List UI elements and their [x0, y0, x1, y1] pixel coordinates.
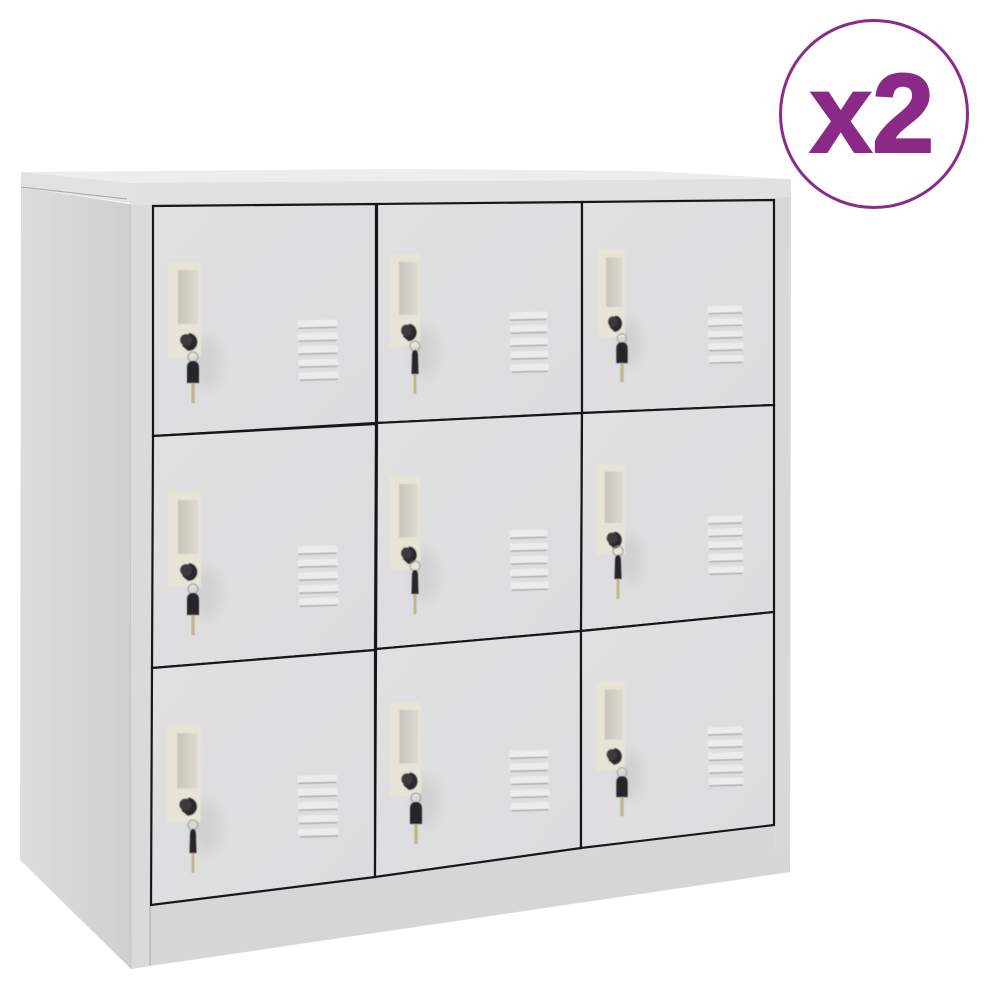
door 2: [377, 202, 582, 423]
door 4: [152, 424, 376, 668]
door 5: [376, 413, 582, 649]
badge label: x2: [810, 51, 934, 176]
door 7: [151, 650, 375, 905]
door 8 vents: [509, 749, 550, 811]
door 7 vents: [297, 774, 339, 838]
cabinet top surface: [21, 169, 791, 184]
panel: locker cabinet: [20, 169, 791, 969]
door 3 handle, lock and key: [598, 250, 641, 382]
door 3 vents: [707, 306, 744, 364]
door 1: [153, 204, 376, 436]
door 4 handle, lock and key: [168, 492, 220, 635]
door 9 vents: [707, 726, 744, 786]
door 6 handle, lock and key: [596, 464, 642, 599]
door 5 handle, lock and key: [390, 476, 437, 614]
door 4 vents: [297, 545, 339, 607]
door 3: [582, 200, 774, 413]
door 5 vents: [509, 529, 549, 591]
lockers: door panels with dark gaps: [151, 200, 774, 905]
door 9 handle, lock and key: [596, 682, 642, 816]
cabinet left side panel: [20, 187, 131, 969]
door 9: [581, 612, 774, 848]
door 2 handle, lock and key: [390, 254, 437, 394]
cabinet front frame: [130, 179, 791, 969]
cabinet top left edge band: [21, 172, 130, 203]
door 6 vents: [707, 516, 744, 575]
badge: x2 quantity: [780, 20, 968, 208]
door 1 handle, lock and key: [168, 262, 220, 403]
door 8 handle, lock and key: [390, 702, 439, 844]
door 7 handle, lock and key: [167, 725, 220, 873]
door 2 vents: [509, 311, 549, 373]
door 8: [375, 631, 581, 877]
door 1 vents: [297, 319, 339, 381]
door 6: [581, 405, 774, 631]
